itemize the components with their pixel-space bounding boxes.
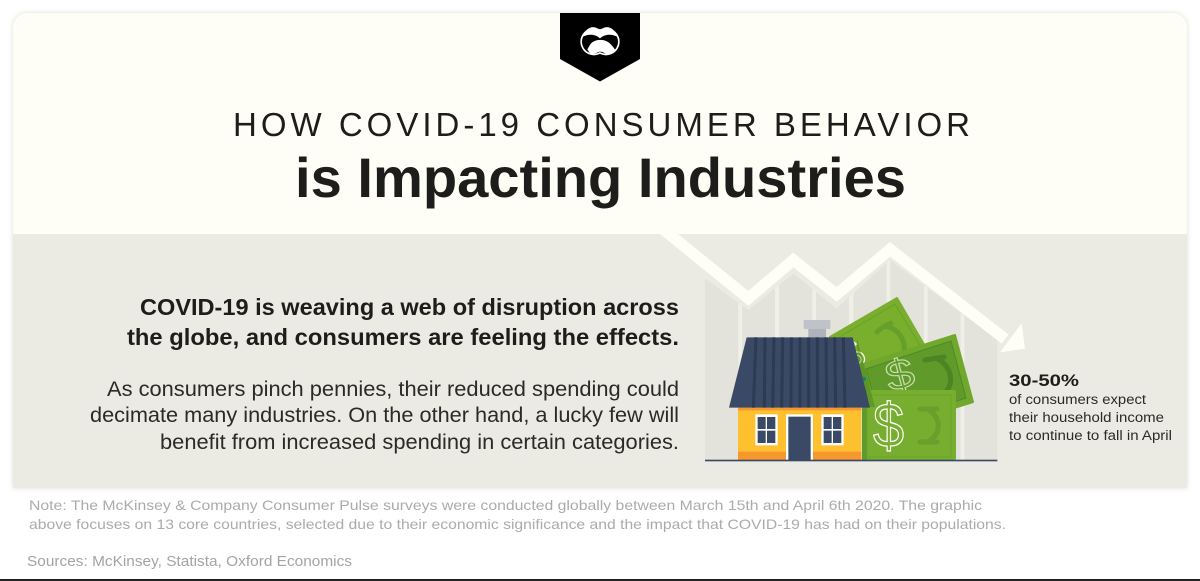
text block: note	[29, 497, 1006, 532]
callout: 30-50% statistic: to continue to fall in April	[1009, 428, 1172, 443]
icon: chimney	[804, 320, 830, 338]
text block: body copy: decimate many industries. On the other hand, a lucky few will	[90, 404, 679, 427]
icon: logo badge	[560, 13, 640, 82]
heading: disruption statement	[127, 294, 679, 350]
panel: header	[13, 13, 1187, 234]
text block: body copy: As consumers pinch pennies, their reduced spending could	[107, 378, 679, 401]
door	[786, 414, 813, 460]
icon: middle banknote	[860, 335, 973, 432]
chart columns	[705, 257, 997, 460]
panel: lower section	[13, 227, 1187, 488]
title line 1: HOW COVID-19 CONSUMER BEHAVIOR	[233, 106, 970, 143]
illustration: house, money and falling chart	[660, 227, 1025, 461]
icon: front banknote	[862, 390, 956, 461]
callout: 30-50% statistic: of consumers expect	[1009, 392, 1146, 407]
text block: body copy	[90, 378, 679, 454]
heading: disruption statement: COVID-19 is weaving a web of disruption across	[140, 294, 679, 320]
heading: disruption statement: the globe, and consumers are feeling the effects.	[127, 324, 679, 350]
icon: back banknote	[829, 298, 940, 411]
icon: front banknote: $	[873, 392, 904, 461]
text block: body copy: benefit from increased spending in certain categories.	[160, 431, 679, 454]
window left	[755, 414, 778, 445]
text block: sources: Sources: McKinsey, Statista, Oxford Economics	[27, 554, 352, 570]
callout: 30-50% statistic	[1009, 371, 1172, 443]
text block: note: Note: The McKinsey & Company Consumer Pulse surveys were conducted globally between March 15th and April 6th 2020. The graphic	[29, 497, 982, 513]
text block: note: above focuses on 13 core countries, selected due to their economic significance and the impact that COVID-19 has had on their populations.	[29, 516, 1006, 532]
title line 2: is Impacting Industries	[295, 146, 906, 209]
arrow: falling trend	[660, 227, 1025, 352]
callout: 30-50% statistic: 30-50%	[1009, 371, 1079, 390]
icon: middle banknote: $	[880, 348, 920, 401]
callout: 30-50% statistic: their household income	[1009, 410, 1164, 425]
window right	[821, 414, 844, 445]
roof	[729, 337, 870, 408]
icon: back banknote: $	[829, 329, 873, 382]
icon: house	[729, 337, 870, 460]
